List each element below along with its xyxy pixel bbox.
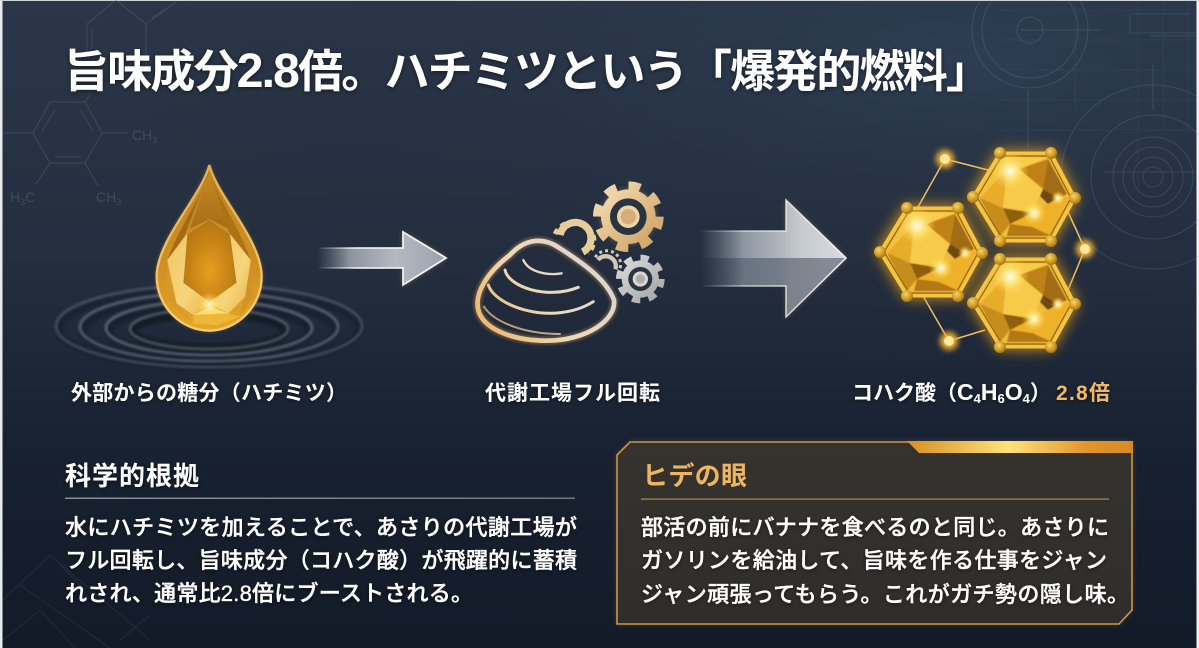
label: succinic acid: 2.8倍 <box>1056 382 1110 405</box>
body text: hide's eye <box>641 515 1129 607</box>
body text: scientific basis: れされ、通常比2.8倍にブーストされる。 <box>65 581 473 606</box>
decoration: chemical labels: 3 <box>152 135 157 145</box>
panel: scientific basis <box>65 461 577 606</box>
icon: honey drop <box>157 165 262 331</box>
label: succinic acid: H <box>981 379 997 405</box>
title: 旨味成分2.8倍。ハチミツという「爆発的燃料」 <box>64 45 991 98</box>
body text: scientific basis: 水にハチミツを加えることで、あさりの代謝工場が <box>65 515 577 540</box>
decoration: chemical labels: C <box>25 189 35 205</box>
arrow: first <box>317 232 446 285</box>
body text: scientific basis: フル回転し、旨味成分（コハク酸）が飛躍的に蓄積 <box>65 548 577 573</box>
label: succinic acid: ） <box>1030 382 1051 405</box>
body text: scientific basis <box>65 515 577 606</box>
arrow: second <box>700 200 846 317</box>
decoration: chemical labels: H <box>10 189 20 205</box>
decoration: chemical structure <box>3 0 176 186</box>
decoration: chemical labels: CH <box>132 127 152 143</box>
decoration: chemical labels: 3 <box>20 197 25 207</box>
label: honey: 外部からの糖分（ハチミツ） <box>71 382 347 405</box>
crystal left <box>874 202 988 302</box>
label: succinic acid <box>852 379 1110 406</box>
panel: hide's eye <box>617 441 1133 624</box>
heading: hide's eye: ヒデの眼 <box>642 461 747 491</box>
clam shell <box>478 241 614 341</box>
icon: molecule network <box>874 147 1094 353</box>
label: succinic acid: 4 <box>974 391 982 406</box>
body text: hide's eye: ジャン頑張ってもらう。これがガチ勢の隠し味。 <box>641 582 1129 607</box>
crystal bottom <box>967 253 1081 353</box>
icon: ripples <box>56 285 362 367</box>
body text: hide's eye: 部活の前にバナナを食べるのと同じ。あさりに <box>641 515 1109 540</box>
decoration: chemical labels: CH <box>96 189 116 205</box>
heading: scientific basis: 科学的根拠 <box>65 461 199 491</box>
crystal top <box>967 147 1081 247</box>
label: succinic acid: 4 <box>1023 391 1031 406</box>
decoration: blueprint top right <box>972 0 1199 269</box>
decoration: chemical labels <box>10 127 157 207</box>
body text: hide's eye: ガソリンを給油して、旨味を作る仕事をジャン <box>641 548 1107 573</box>
small silver gear <box>619 258 662 300</box>
partial small gear <box>595 251 621 271</box>
large gear <box>597 186 659 248</box>
decoration: chemical labels: 3 <box>116 197 121 207</box>
label: succinic acid: O <box>1005 379 1023 405</box>
accent bar <box>907 441 1133 453</box>
label: succinic acid: コハク酸（C <box>852 379 974 405</box>
icon: clam with gears <box>478 186 662 341</box>
label: factory: 代謝工場フル回転 <box>485 382 660 405</box>
partial gold gear <box>555 222 594 253</box>
label: succinic acid: 6 <box>997 391 1005 406</box>
decoration: blueprint bottom left <box>3 555 150 648</box>
